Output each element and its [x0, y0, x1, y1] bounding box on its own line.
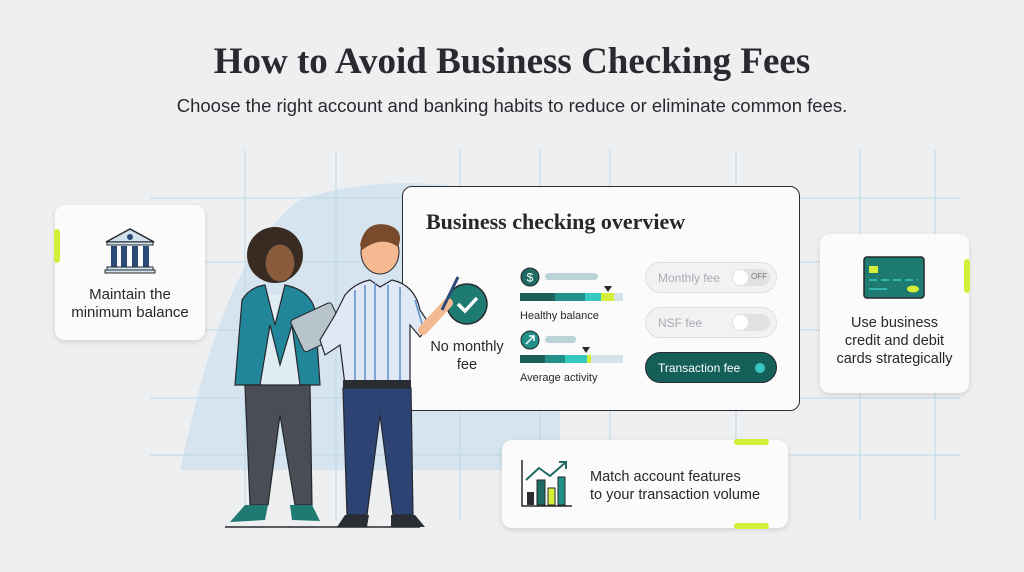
metric: average activity: Average activity — [520, 372, 597, 384]
panel heading: Business checking overview — [426, 209, 685, 234]
toggle: NSF fee: NSF fee — [658, 316, 702, 330]
woman — [247, 227, 303, 283]
card: use cards strategically: Use business — [851, 315, 938, 331]
text: no monthly fee — [430, 339, 504, 373]
metric: healthy balance: Healthy balance — [520, 310, 599, 322]
toggle: monthly fee — [645, 262, 777, 293]
card: match features to transaction volume — [502, 440, 788, 528]
tablet — [290, 302, 345, 353]
card: maintain minimum balance: minimum balance — [71, 304, 189, 321]
card: use cards strategically — [820, 234, 969, 393]
panel: business checking overview — [402, 186, 800, 411]
card: maintain minimum balance — [55, 205, 205, 340]
card: maintain minimum balance: Maintain the — [89, 286, 171, 303]
title: How to Avoid Business Checking Fees — [214, 41, 810, 82]
icon: bank — [104, 228, 156, 274]
toggle: monthly fee: OFF — [751, 272, 767, 281]
icon: bar chart — [521, 460, 572, 507]
metric: average activity — [520, 330, 623, 384]
icon: credit card — [863, 256, 925, 299]
toggle: transaction fee — [645, 352, 777, 383]
toggle: NSF fee — [645, 307, 777, 338]
icon: check circle — [448, 283, 488, 325]
toggle: monthly fee: Monthly fee — [658, 271, 720, 285]
metric: healthy balance: $ — [527, 270, 534, 284]
text: no monthly fee: No monthly — [430, 339, 504, 355]
card: use cards strategically: credit and debit — [845, 333, 944, 349]
text: no monthly fee: fee — [457, 357, 477, 373]
card: match features to transaction volume: Match account features — [590, 469, 741, 485]
man — [361, 230, 399, 274]
card: match features to transaction volume: to your transaction volume — [590, 487, 760, 503]
metric: healthy balance — [520, 268, 623, 322]
toggle: transaction fee: Transaction fee — [658, 361, 740, 375]
subtitle: Choose the right account and banking habits to reduce or eliminate common fees. — [177, 95, 847, 116]
illustration: two people — [225, 224, 460, 528]
card: use cards strategically: cards strategically — [836, 351, 953, 367]
